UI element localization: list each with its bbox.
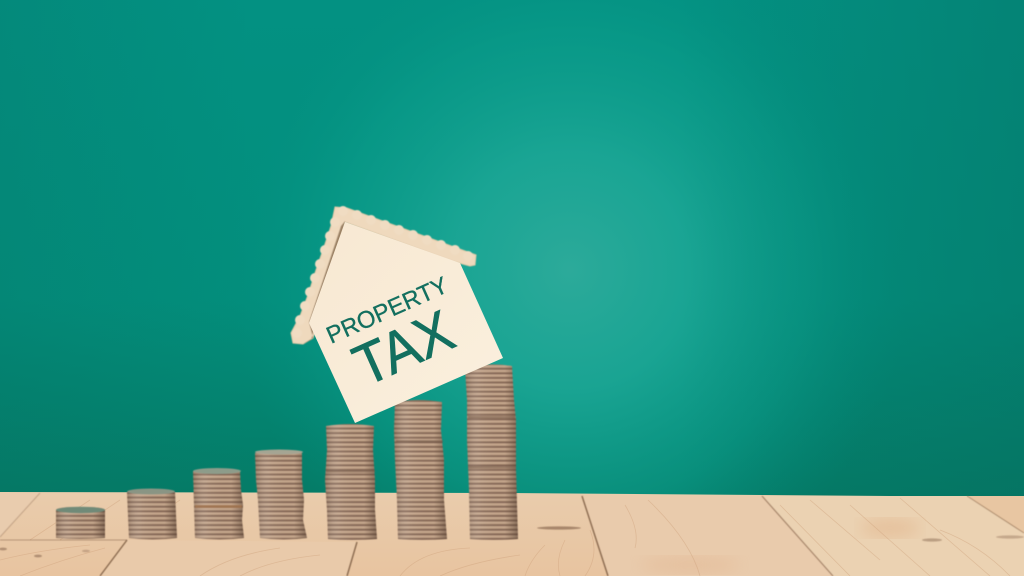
coin stack 3 [193,468,244,540]
house front panel [309,222,503,423]
house label: PROPERTY: PROPERTY [322,272,452,349]
roof underside shadow [303,221,345,344]
roof scallops [292,206,473,338]
coin stack 6 [394,400,447,540]
coin stack 4 [255,450,307,540]
coin stack 1 [56,507,105,539]
tilted wooden house [291,206,503,423]
coin stack 7 [465,364,518,540]
coin stacks rising left to right [56,364,518,540]
coin stack 2 [127,488,177,540]
house roof [291,206,476,344]
wood grain [0,498,1010,576]
wooden table top with plank seams [0,492,1024,576]
coin stack 5 [325,424,377,540]
house label: TAX: TAX [344,298,463,399]
